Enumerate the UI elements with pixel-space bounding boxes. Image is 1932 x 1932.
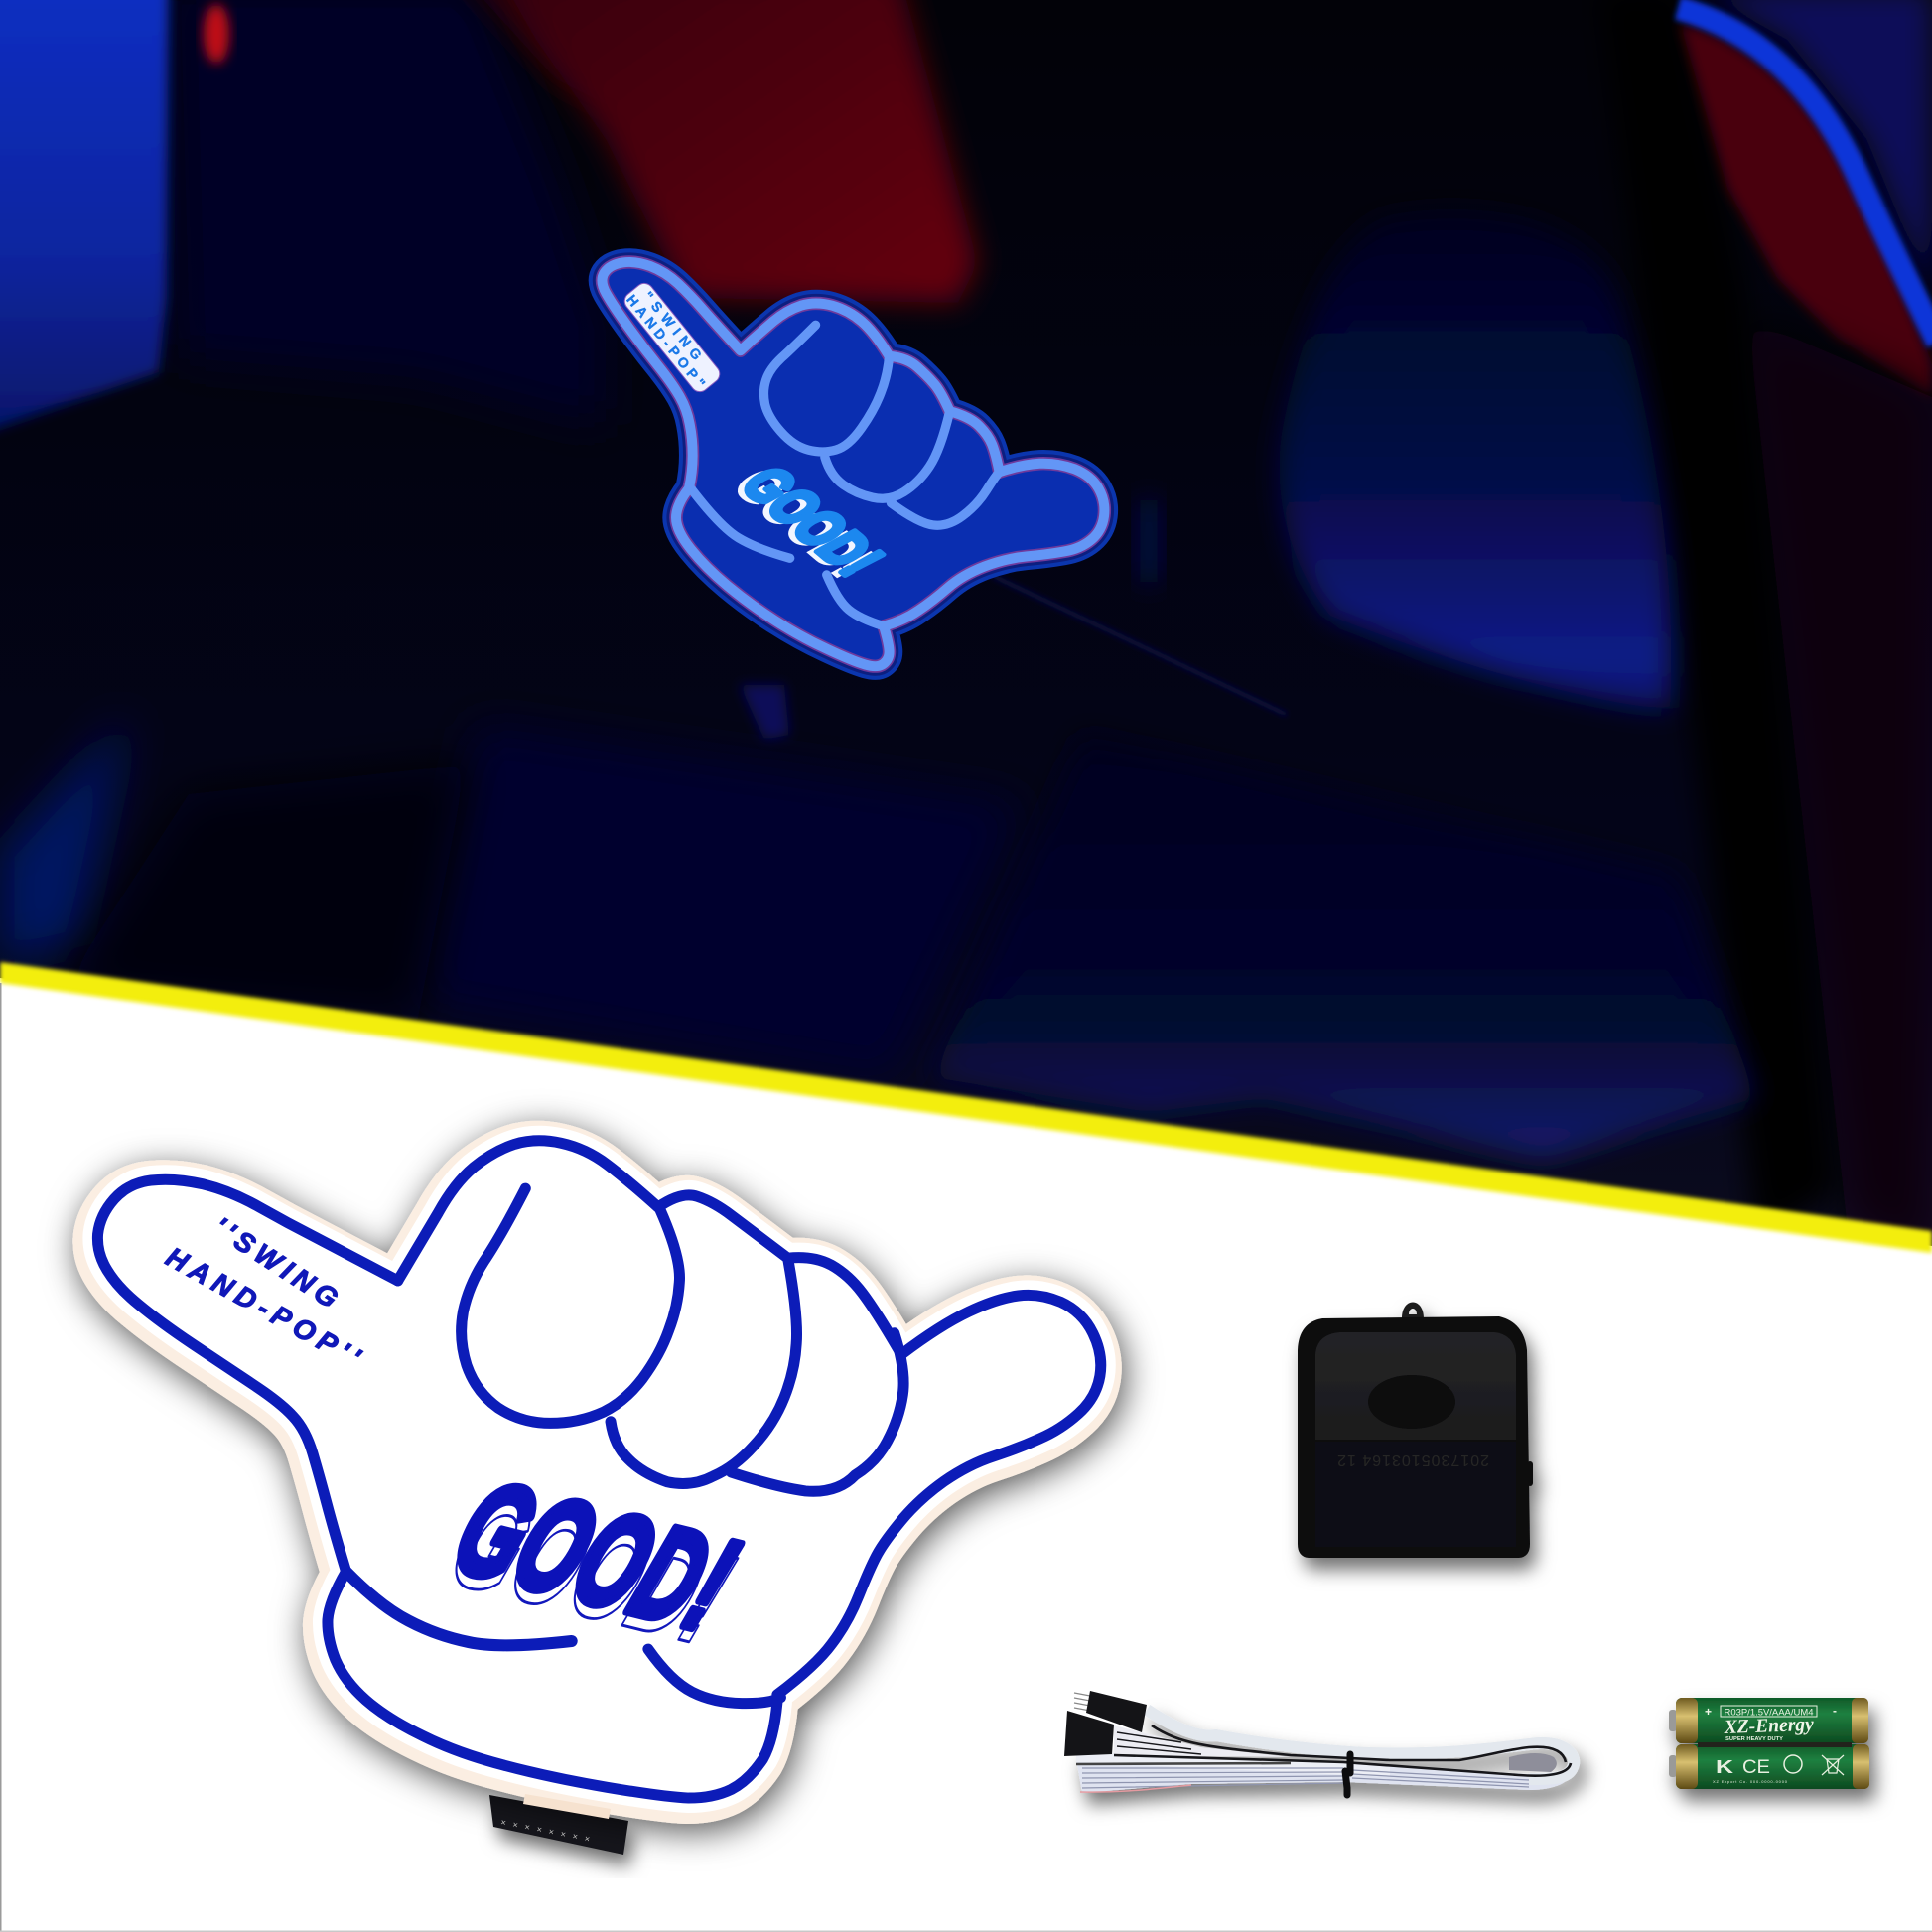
hand finger lines (346, 1188, 903, 1704)
lower left floor glow (0, 715, 129, 963)
yellow diagonal band (0, 962, 1932, 1253)
large white hand product (95, 1141, 1101, 1855)
dark red lower right wall (1747, 318, 1932, 1261)
hand blue outline (97, 1141, 1101, 1798)
sticker dark gap (602, 262, 1104, 666)
hand cream silhouette (95, 1144, 1099, 1801)
red panel at top right (1680, 23, 1932, 397)
seat belt line (993, 576, 1287, 715)
sticker GOOD text: GOOD! (729, 456, 894, 588)
dark seat shadow lower left (60, 764, 467, 1023)
hand slogan line two: HAND-POP'' (161, 1241, 366, 1374)
sticker slogan pill: "SWING (640, 288, 705, 363)
top battery (1676, 1698, 1868, 1743)
small blue reflection under the sticker (740, 685, 789, 740)
cable lower band (1076, 1710, 1574, 1793)
dark pillar at top right (1598, 0, 1837, 1241)
dim blue haze at top right (1698, 0, 1932, 298)
box moulded serial number: 2017305103164 12 (1336, 1451, 1489, 1468)
small blue reflection right of the sticker (1138, 500, 1160, 582)
sticker inner face with glowing outline (602, 262, 1104, 666)
bottom battery: CE (1742, 1757, 1770, 1778)
hand GOOD text: GOOD! (431, 1468, 751, 1672)
cable ribbon fan from connector (1114, 1725, 1291, 1757)
sticker finger lines (691, 325, 1000, 626)
red tail light glow (204, 4, 229, 64)
top battery: + (1705, 1705, 1712, 1719)
white lower panel (0, 978, 1932, 1932)
top battery: R03P/1.5V/AAA/UM4 (1724, 1708, 1813, 1718)
cable wire stripes (1082, 1768, 1529, 1788)
lower centre seat cushion (417, 725, 1023, 1082)
sticker GOOD text: GOOD! (721, 457, 885, 589)
cable loop inner gap (1509, 1753, 1557, 1772)
cable connector two (1064, 1711, 1114, 1756)
cable connector one (1074, 1691, 1147, 1732)
battery terminals (1669, 1710, 1677, 1777)
box side button (1527, 1461, 1533, 1486)
connector under the hand (489, 1795, 628, 1855)
left seat headrest (169, 0, 606, 427)
top battery: SUPER HEAVY DUTY (1725, 1736, 1784, 1742)
cable black wires (1076, 1725, 1571, 1776)
connector under the hand: ×××××××× (500, 1817, 598, 1846)
lower right seat cushion (933, 735, 1755, 1159)
bottom image edge (0, 1930, 1932, 1932)
hand GOOD text (431, 1454, 755, 1672)
hand slogan line one: ''SWING (208, 1211, 344, 1313)
bottom battery (1676, 1742, 1869, 1789)
cable red edge (1080, 1785, 1191, 1792)
dark car interior photo background (0, 0, 1932, 1291)
box hanging loop (1402, 1303, 1424, 1318)
box body (1298, 1316, 1530, 1558)
hand GOOD text: GOOD! (435, 1454, 755, 1658)
box face lower (1315, 1442, 1516, 1547)
right headrest (1280, 211, 1671, 709)
box face upper (1315, 1332, 1516, 1440)
sticker GOOD text (721, 456, 894, 589)
box oval badge (1368, 1375, 1455, 1429)
bottom battery: K (1716, 1757, 1733, 1777)
projected blue hand sticker (602, 262, 1104, 666)
dim red upholstery behind the headrest (457, 0, 635, 119)
battery seam shadow (1698, 1742, 1852, 1747)
hand bottom cream tab (523, 1794, 611, 1819)
sticker slogan pill: HAND-POP" (623, 292, 709, 391)
bottom battery: XZ Export Co. 000-0000-0000 (1713, 1779, 1788, 1784)
blue lit wall at top left (0, 0, 169, 437)
red upholstery at top centre (496, 0, 978, 303)
cable tie (1345, 1754, 1350, 1795)
blue neon arc at top right (1678, 8, 1932, 343)
black control box (1298, 1303, 1533, 1558)
top battery: XZ-Energy (1723, 1714, 1814, 1738)
two AAA batteries (1669, 1698, 1869, 1789)
hand white face (97, 1141, 1101, 1798)
top battery: - (1833, 1704, 1837, 1718)
sticker outer ring (602, 262, 1104, 666)
left image edge (0, 983, 2, 1932)
ribbon cable (1064, 1691, 1574, 1795)
